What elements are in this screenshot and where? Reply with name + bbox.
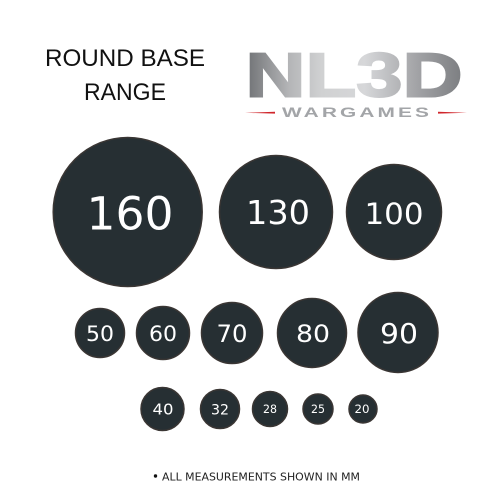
base 70: 70 bbox=[216, 320, 248, 348]
logo: NL3D Wargames: NL3D bbox=[246, 42, 462, 110]
base 80: 80 bbox=[296, 320, 330, 348]
base 100 bbox=[346, 164, 442, 260]
base 70 bbox=[202, 302, 262, 364]
base 25: 25 bbox=[311, 402, 325, 416]
base 50 bbox=[76, 308, 124, 358]
base 50: 50 bbox=[86, 322, 114, 346]
base 160: 160 bbox=[86, 188, 174, 240]
base 100: 100 bbox=[364, 197, 424, 231]
base 32: 32 bbox=[211, 402, 229, 418]
base 160 bbox=[53, 138, 202, 286]
base 40 bbox=[141, 388, 184, 430]
base 60 bbox=[136, 306, 190, 360]
base 32 bbox=[200, 390, 240, 428]
base 28: 28 bbox=[263, 402, 277, 416]
base 90: 90 bbox=[380, 317, 418, 350]
base 25 bbox=[303, 394, 333, 424]
base 80 bbox=[278, 298, 346, 368]
title: RANGE bbox=[84, 79, 166, 106]
base 28 bbox=[252, 392, 288, 426]
base 60: 60 bbox=[149, 322, 177, 346]
footnote: ALL MEASUREMENTS SHOWN IN MM bbox=[162, 472, 360, 484]
base 20 bbox=[349, 395, 377, 423]
title bbox=[45, 45, 205, 106]
base 90 bbox=[358, 292, 438, 372]
title: ROUND BASE bbox=[45, 45, 205, 72]
logo: NL3D Wargames: WARGAMES bbox=[282, 105, 432, 120]
logo: NL3D Wargames bbox=[245, 42, 467, 120]
base 20: 20 bbox=[354, 402, 370, 416]
base 130 bbox=[220, 156, 332, 268]
base 40: 40 bbox=[152, 400, 174, 418]
base 130: 130 bbox=[246, 193, 310, 232]
